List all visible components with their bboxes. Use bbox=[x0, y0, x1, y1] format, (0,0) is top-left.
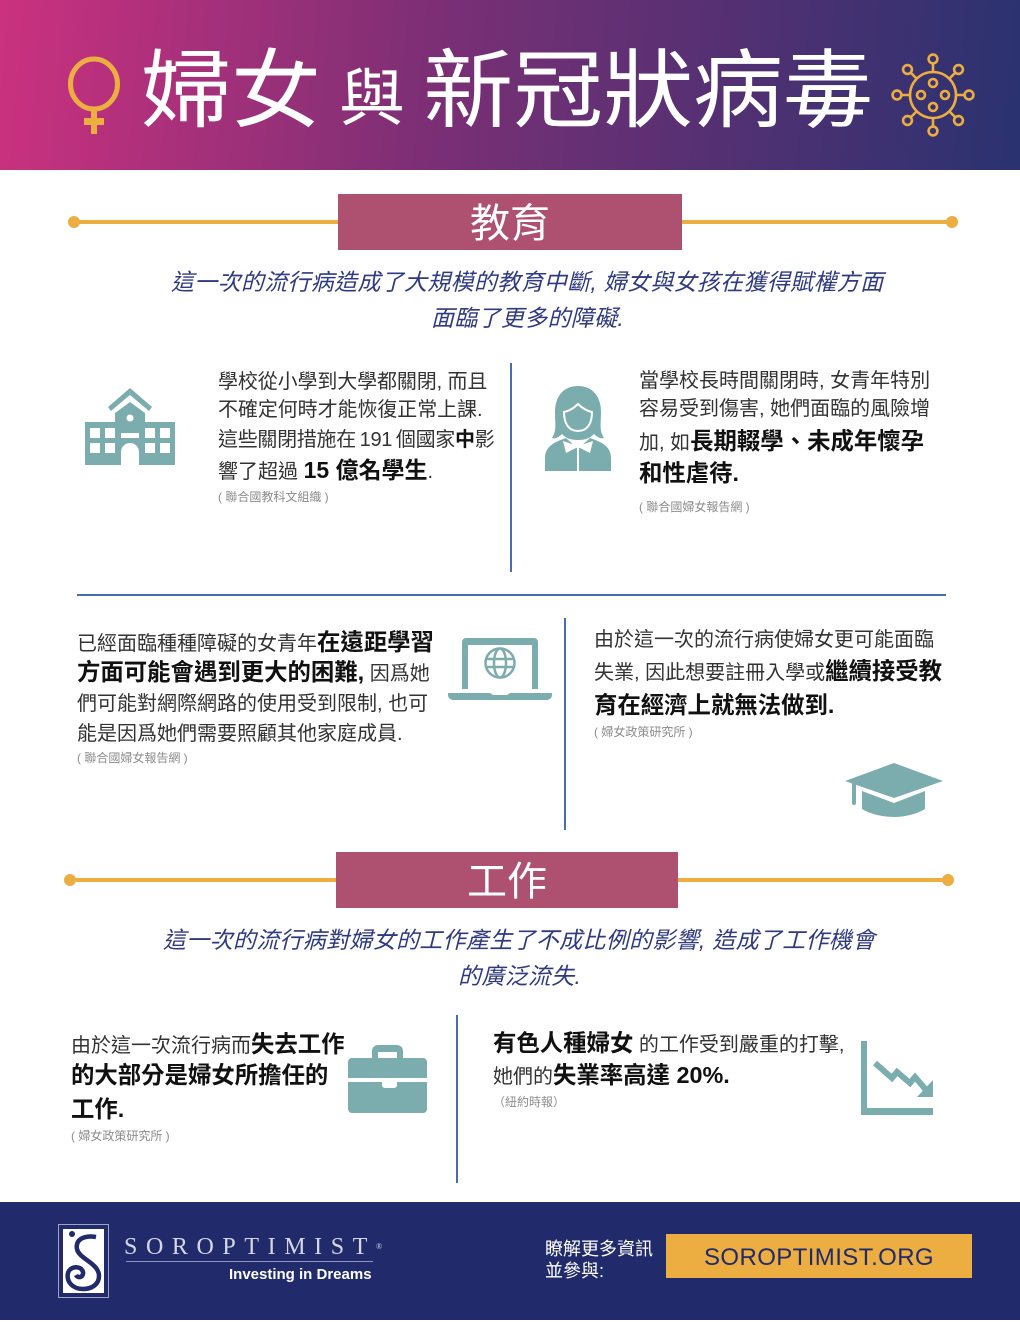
intro text: education: 這一次的流行病造成了大規模的教育中斷, 婦女與女孩在獲得賦權方面 bbox=[171, 269, 883, 295]
icon: graduation cap bbox=[845, 763, 943, 817]
text block: school closures bbox=[218, 371, 494, 504]
source: （紐約時報） bbox=[493, 1095, 565, 1109]
source: ( 聯合國婦女報告網 ) bbox=[77, 751, 188, 765]
text block: job losses: 工作. bbox=[71, 1096, 124, 1122]
divider bbox=[564, 618, 566, 830]
website button bbox=[666, 1234, 972, 1278]
text block: school closures: 學校從小學到大學都關閉, 而且 bbox=[218, 371, 487, 393]
section rule right: education bbox=[682, 220, 952, 224]
icon: virus bbox=[891, 53, 975, 137]
icon: briefcase bbox=[348, 1045, 427, 1113]
source: ( 聯合國教科文組織 ) bbox=[218, 490, 329, 504]
text block: job losses bbox=[71, 1031, 345, 1143]
text block: remote learning: 能是因爲她們需要照顧其他家庭成員. bbox=[77, 723, 403, 745]
rule end dot bbox=[64, 874, 76, 886]
logo: Soroptimist mark bbox=[58, 1224, 109, 1298]
heading: education: 教育 bbox=[470, 202, 550, 246]
section rule left: work bbox=[76, 878, 336, 882]
footer bbox=[0, 1202, 1020, 1320]
source: ( 婦女政策研究所 ) bbox=[71, 1129, 170, 1143]
intro text: work: 的廣泛流失. bbox=[458, 963, 581, 989]
divider bbox=[77, 594, 946, 596]
text block: women of colour bbox=[493, 1030, 844, 1109]
call to action text bbox=[545, 1239, 653, 1281]
rule end dot bbox=[68, 216, 80, 228]
section rule right: work bbox=[678, 878, 948, 882]
heading: work bbox=[336, 852, 678, 908]
call to action text: 瞭解更多資訊 bbox=[545, 1239, 653, 1259]
text block: remote learning: 方面可能會遇到更大的困難, 因爲她 bbox=[77, 659, 430, 685]
intro text: education: 面臨了更多的障礙. bbox=[431, 305, 624, 331]
text block: remote learning bbox=[77, 629, 434, 765]
divider bbox=[510, 363, 512, 572]
divider bbox=[456, 1015, 458, 1183]
rule end dot bbox=[946, 216, 958, 228]
icon: young woman bbox=[545, 386, 611, 471]
text block: girls at risk: 當學校長時間關閉時, 女青年特別 bbox=[639, 370, 930, 392]
title: 婦女 與新冠狀病毒 bbox=[141, 42, 873, 138]
intro text: education bbox=[171, 269, 886, 331]
call to action text: 並參與: bbox=[545, 1261, 604, 1281]
intro text: work bbox=[163, 927, 878, 989]
section rule left: education bbox=[74, 220, 338, 224]
icon: school bbox=[85, 388, 175, 465]
heading: work: 工作 bbox=[467, 860, 547, 904]
text block: job losses: 的大部分是婦女所擔任的 bbox=[71, 1062, 328, 1088]
text block: unemployment and education: 由於這一次的流行病使婦女更可能面臨 bbox=[594, 629, 934, 651]
icon: falling chart bbox=[861, 1041, 933, 1115]
text block: job losses: 由於這一次流行病而失去工作 bbox=[71, 1031, 345, 1057]
logo: wordmark bbox=[124, 1234, 382, 1283]
text block: school closures: 不確定何時才能恢復正常上課. bbox=[218, 399, 482, 421]
logo: wordmark: Investing in Dreams bbox=[229, 1266, 372, 1283]
intro text: work: 這一次的流行病對婦女的工作產生了不成比例的影響, 造成了工作機會 bbox=[163, 927, 875, 953]
icon: female symbol bbox=[68, 56, 120, 134]
source: ( 聯合國婦女報告網 ) bbox=[639, 500, 750, 514]
rule end dot bbox=[942, 874, 954, 886]
text block: girls at risk bbox=[639, 370, 930, 514]
heading: education bbox=[338, 194, 682, 250]
website button: SOROPTIMIST.ORG bbox=[704, 1244, 934, 1271]
text block: girls at risk: 容易受到傷害, 她們面臨的風險增 bbox=[639, 398, 930, 420]
text block: school closures: 響了超過 15 億名學生. bbox=[218, 457, 433, 483]
text block: unemployment and education: 育在經濟上就無法做到. bbox=[594, 692, 834, 718]
source: ( 婦女政策研究所 ) bbox=[594, 725, 693, 739]
text block: remote learning: 已經面臨種種障礙的女青年在遠距學習 bbox=[77, 629, 434, 655]
icon: laptop with globe bbox=[448, 638, 552, 700]
text block: women of colour: 有色人種婦女 的工作受到嚴重的打擊, bbox=[493, 1030, 844, 1056]
text block: school closures: 這些關閉措施在 191 個國家中影 bbox=[218, 429, 494, 451]
text block: remote learning: 們可能對網際網路的使用受到限制, 也可 bbox=[77, 693, 428, 715]
logo: wordmark: SOROPTIMIST® bbox=[124, 1234, 382, 1260]
text block: unemployment and education bbox=[594, 628, 942, 739]
text block: unemployment and education: 失業, 因此想要註冊入學或繼續接受教 bbox=[594, 658, 942, 684]
text block: girls at risk: 和性虐待. bbox=[639, 460, 739, 486]
text block: girls at risk: 加, 如長期輟學、未成年懷孕 bbox=[639, 428, 924, 454]
header banner bbox=[0, 0, 1020, 170]
text block: women of colour: 她們的失業率高達 20%. bbox=[493, 1062, 730, 1088]
